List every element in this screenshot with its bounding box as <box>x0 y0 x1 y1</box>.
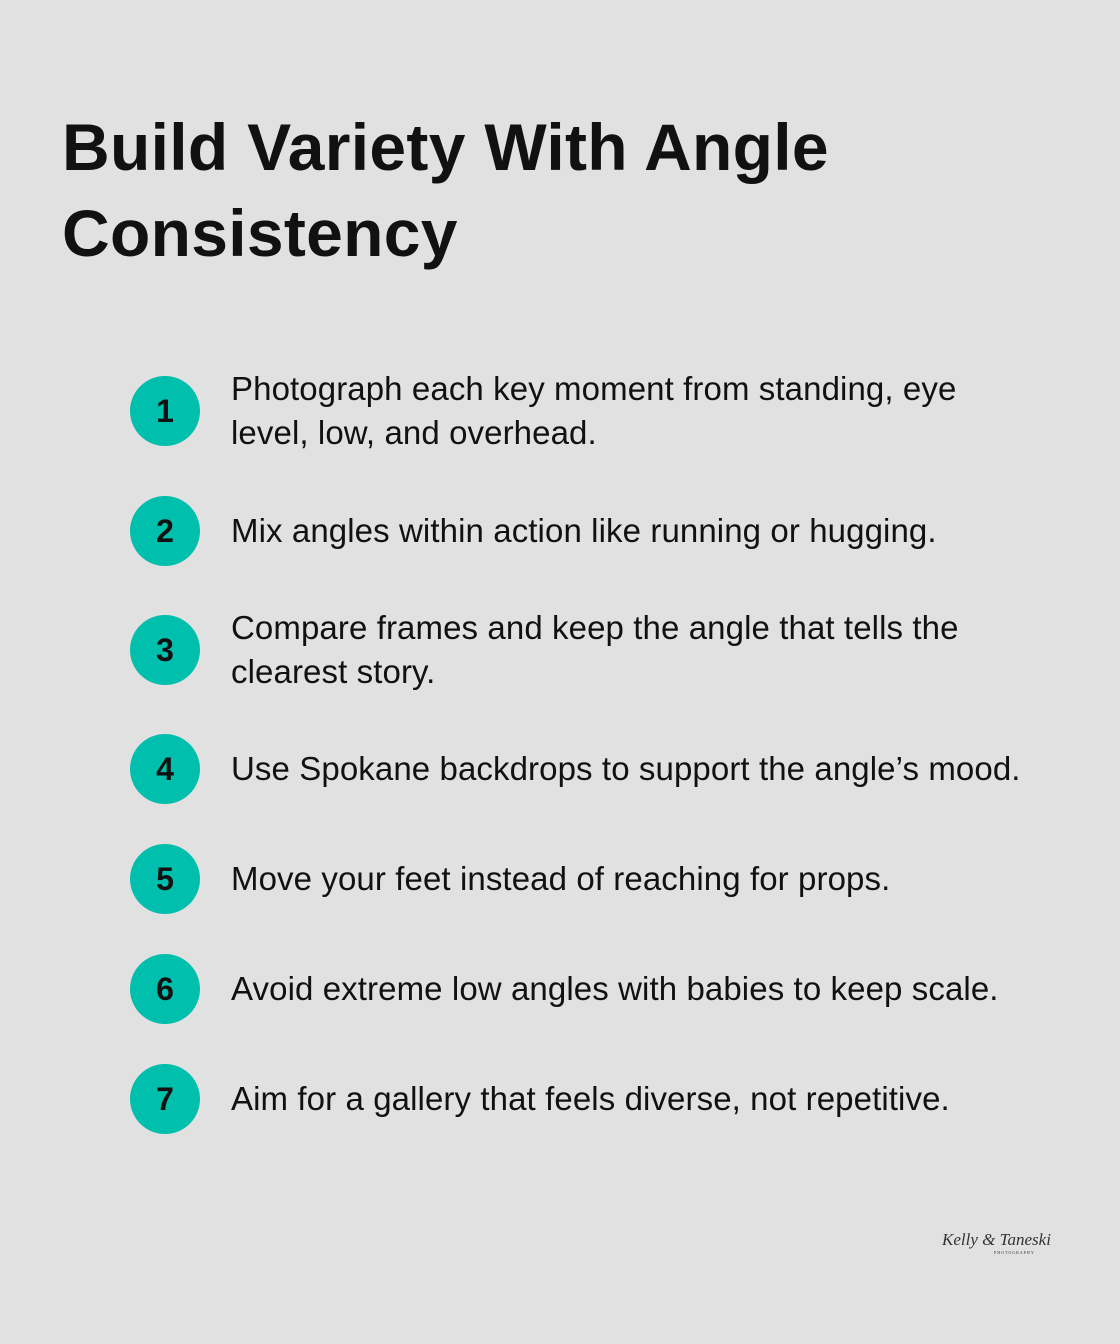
item 4: 4 <box>156 751 174 787</box>
item 1: 1 <box>156 393 174 429</box>
item 7: 7 <box>156 1081 174 1117</box>
item 7 <box>130 1064 950 1134</box>
item 3: 3 <box>156 632 174 668</box>
item 2: 2 <box>156 513 174 549</box>
logo signature: PHOTOGRAPHY <box>994 1250 1035 1255</box>
item 1: Photograph each key moment from standing, eye level, low, and overhead. <box>231 370 956 451</box>
title: Consistency <box>62 196 458 270</box>
logo signature: Kelly & Taneski <box>942 1230 1051 1249</box>
item 5: 5 <box>156 861 174 897</box>
item 5: Move your feet instead of reaching for props. <box>231 860 890 897</box>
item 3: Compare frames and keep the angle that tells the clearest story. <box>231 609 959 690</box>
item 6: 6 <box>156 971 174 1007</box>
title: Build Variety With Angle <box>62 110 829 184</box>
item 7: Aim for a gallery that feels diverse, not repetitive. <box>231 1080 950 1117</box>
title <box>62 110 829 270</box>
item 4 <box>130 734 1021 804</box>
item 2: Mix angles within action like running or hugging. <box>231 512 937 549</box>
item 4: Use Spokane backdrops to support the angle’s mood. <box>231 750 1021 787</box>
item 2 <box>130 496 937 566</box>
item 5 <box>130 844 890 914</box>
item 6: Avoid extreme low angles with babies to keep scale. <box>231 970 999 1007</box>
item 6 <box>130 954 999 1024</box>
